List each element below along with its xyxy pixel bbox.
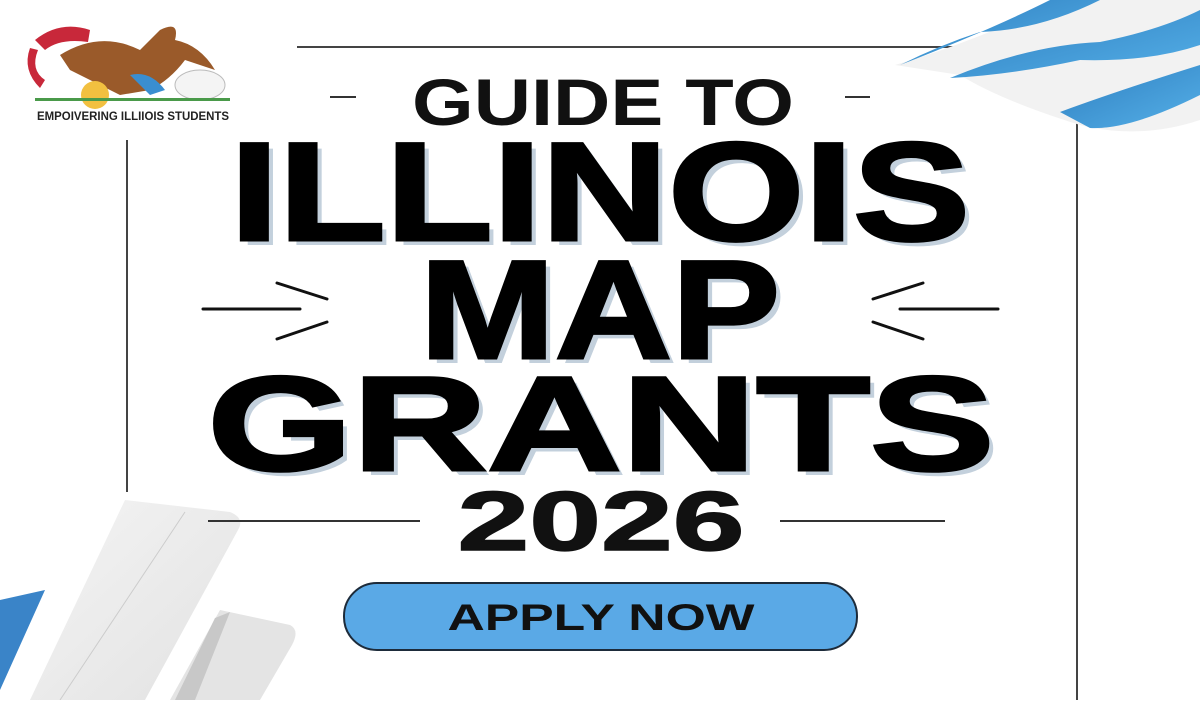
tagline: EMPOIVERING ILLIIOIS STUDENTS (37, 109, 229, 123)
pages bottom left (0, 500, 296, 700)
button: apply now (344, 583, 857, 650)
year 2026: 2026 (458, 474, 744, 568)
title: ILLINOIS MAP GRANTS: ILLINOIS (236, 118, 976, 275)
title: ILLINOIS MAP GRANTS: MAP (426, 236, 786, 393)
title: ILLINOIS MAP GRANTS: GRANTS (208, 350, 994, 499)
title: ILLINOIS MAP GRANTS: ILLINOIS (230, 113, 970, 270)
icon: Illinois seal eagle (28, 27, 230, 109)
title: ILLINOIS MAP GRANTS: GRANTS (214, 355, 1000, 504)
heading: GUIDE TO: GUIDE TO (412, 65, 794, 139)
title: ILLINOIS MAP GRANTS (208, 113, 1000, 504)
button: apply now: APPLY NOW (448, 597, 755, 638)
flag corner top right (895, 0, 1200, 131)
arrow left (203, 283, 327, 339)
arrow right (873, 283, 998, 339)
title: ILLINOIS MAP GRANTS: MAP (420, 231, 780, 388)
frame lines (127, 47, 1077, 700)
